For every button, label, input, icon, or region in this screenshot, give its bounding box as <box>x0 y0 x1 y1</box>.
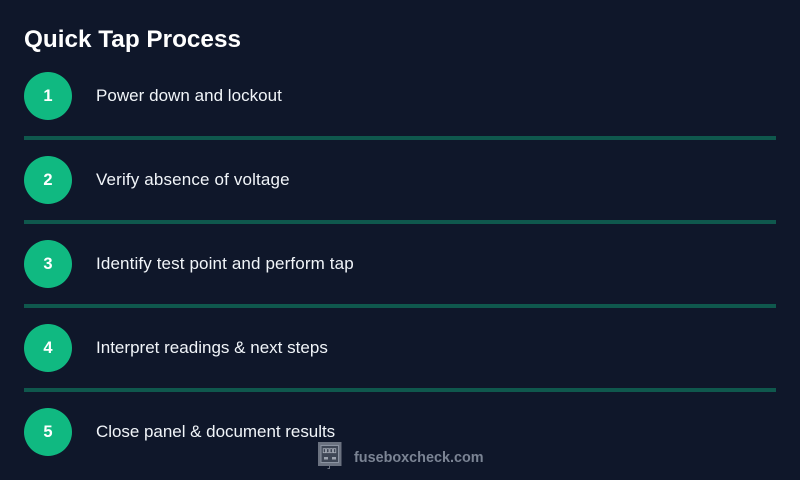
step 5: Close panel & document results <box>96 422 335 441</box>
title: Quick Tap Process <box>24 26 241 52</box>
step 2 <box>24 156 290 204</box>
step 3: Identify test point and perform tap <box>96 254 354 273</box>
step 4: 4 <box>43 339 53 357</box>
step 3: 3 <box>43 255 53 273</box>
step 4: Interpret readings & next steps <box>96 338 328 357</box>
step 5 <box>24 408 335 456</box>
brand text: fuseboxcheck.com <box>354 450 484 466</box>
step 4 <box>24 324 328 372</box>
step 1: 1 <box>43 87 53 105</box>
step 1 <box>24 72 282 120</box>
step 3 <box>24 240 354 288</box>
step 2: 2 <box>43 171 53 189</box>
step 1: Power down and lockout <box>96 86 282 105</box>
step 5: 5 <box>43 423 53 441</box>
icon: fuse box logo <box>318 442 342 469</box>
step 2: Verify absence of voltage <box>96 170 290 189</box>
